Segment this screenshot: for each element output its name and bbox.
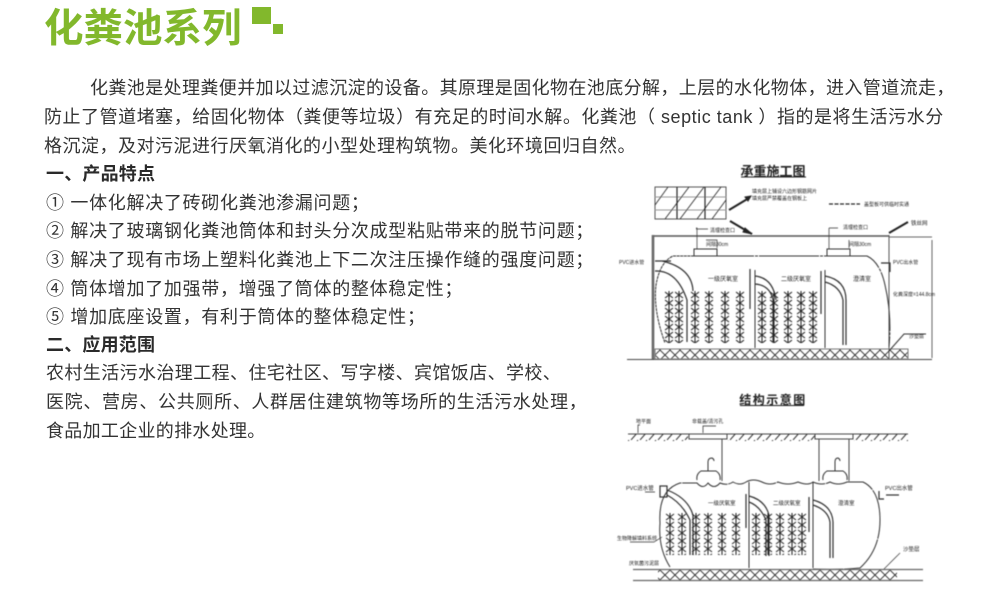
ground slab and walls: 铁丝网 [911,219,928,227]
dashed legend [829,201,909,208]
dashed legend: 盖型板可供临时实通 [864,201,909,208]
icon: green squares [252,7,283,34]
arrows and note [729,188,817,234]
applications text: 食品加工企业的排水处理。 [46,421,266,441]
feature list [46,193,594,327]
tank outline: 间隔30cm [849,241,871,248]
chamber labels: 化粪深度=144.8cm [893,291,935,298]
heading: applications: 二、应用范围 [46,335,155,355]
chamber labels: 一级厌氧室 [708,275,738,283]
tank outline [655,224,890,348]
chamber labels: 沙垫层 [909,333,924,340]
ground surface: 非载盖/清污孔 [692,418,723,425]
heading: product features: 一、产品特点 [46,164,155,184]
arrows and note: 填充层严禁覆盖在钢板上 [752,195,807,202]
applications text [46,363,587,441]
intro paragraph: 化粪池是处理粪便并加以过滤沉淀的设备。其原理是固化物在池底分解，上层的水化物体，进入管道流走， [90,78,955,98]
pipes [645,486,899,558]
intro paragraph [44,78,955,156]
diagram: load-bearing construction [619,164,935,360]
pipes [655,261,890,345]
aeration media columns [665,513,807,555]
intro paragraph: 防止了管道堵塞，给固化物体（粪便等垃圾）有充足的时间水解。化粪池（ septic tank ）指的是将生活污水分 [44,107,944,127]
chamber labels: 二级厌氧室 [781,275,811,283]
tank outline: 清理检查口 [710,227,735,234]
labels: 澄清室 [838,499,855,507]
feature list: ③ 解决了现有市场上塑料化粪池上下二次注压操作缝的强度问题； [46,250,594,270]
labels [617,484,920,569]
sand bed [655,349,908,359]
feature list: ⑤ 增加底座设置，有利于筒体的整体稳定性； [46,307,426,327]
aeration media columns [664,291,818,343]
chamber labels: 澄清室 [853,275,871,283]
risers [722,439,849,481]
diagram title: 结构示意图 [739,392,807,407]
labels: 厌氧菌污泥层 [629,560,659,567]
tank outline: 间隔30cm [706,241,728,248]
arrows and note: 填充层上铺设六边形钢筋网片 [752,188,817,195]
title: 化粪池系列 [44,7,242,51]
chamber labels [619,259,935,351]
intro paragraph: 格沉淀，及对污泥进行厌氧消化的小型处理构筑物。美化环境回归自然。 [44,136,636,156]
labels: PVC进水管 [626,484,654,492]
hatched slab detail [655,187,726,219]
ground surface [628,418,908,441]
feature list: ① 一体化解决了砖砌化粪池渗漏问题； [46,193,370,213]
feature list: ② 解决了玻璃钢化粪池筒体和封头分次成型粘贴带来的脱节问题； [46,221,594,241]
labels: 沙垫层 [903,545,920,553]
tank outline [660,458,880,569]
labels: 一级厌氧室 [708,499,736,507]
feature list: ④ 筒体增加了加强带，增强了筒体的整体稳定性； [46,279,463,299]
sand bed [633,570,923,580]
ground surface: 地平面 [636,418,651,425]
diagram title: 承重施工图 [740,164,806,179]
chamber labels: PVC进水管 [619,259,644,266]
applications text: 医院、营房、公共厕所、人群居住建筑物等场所的生活污水处理， [46,392,587,412]
labels: 二级厌氧室 [773,499,801,507]
labels: PVC出水管 [885,484,913,492]
applications text: 农村生活污水治理工程、住宅社区、写字楼、宾馆饭店、学校、 [46,363,561,383]
labels: 生物降解填料系统 [617,535,657,542]
diagram: structure schematic [617,392,923,580]
tank outline: 清理检查口 [843,224,868,231]
chamber labels: PVC出水管 [893,259,918,266]
ground slab and walls [627,219,932,360]
